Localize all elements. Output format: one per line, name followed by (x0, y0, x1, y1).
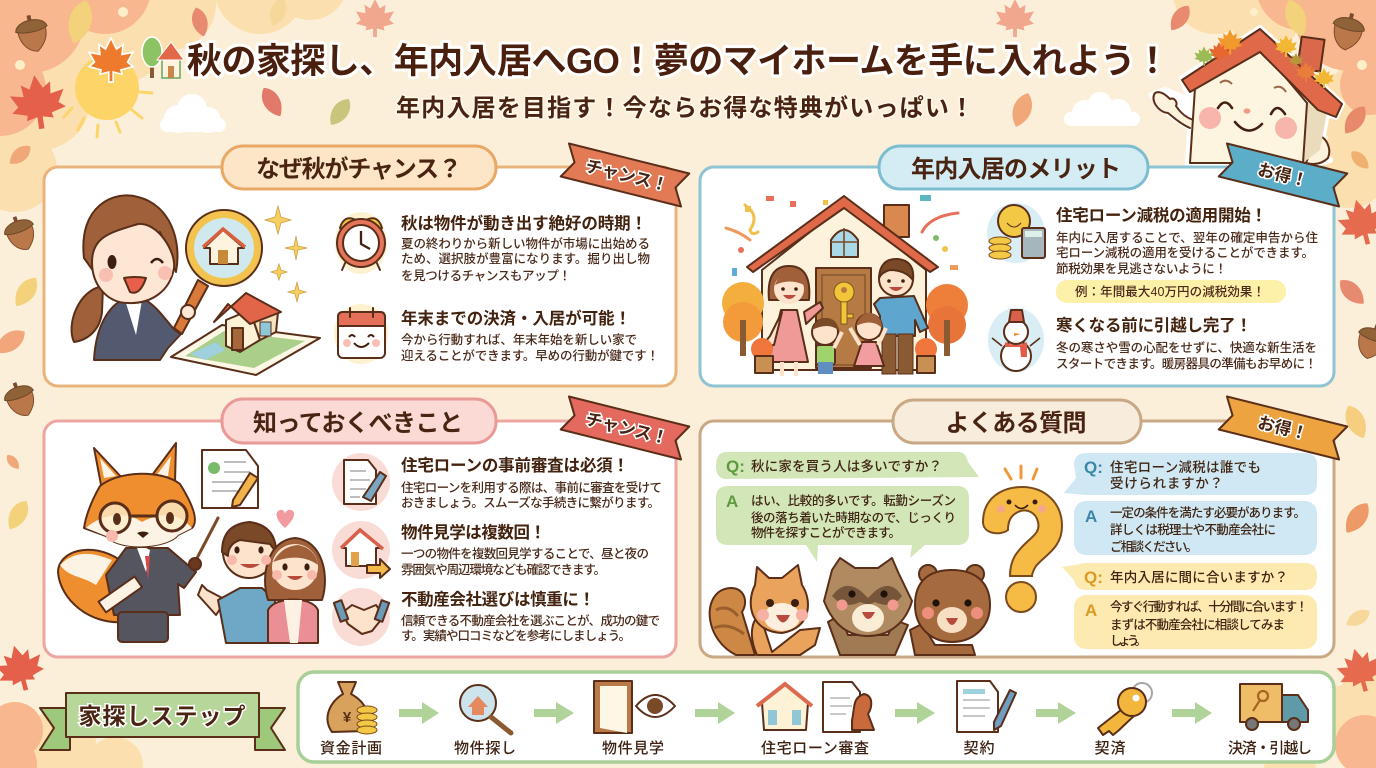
Q&A bubble: right answer 2: まずは不動産会社に相談してみま (1110, 617, 1285, 632)
text: 不動産会社選びは慎重に！ (401, 590, 660, 643)
text: 物件見学は複数回！: 雰囲気や周辺環境なども確認できます。 (401, 562, 606, 577)
Q&A bubble: right question 2: Q: (1084, 568, 1103, 587)
step: 決済・引越し: 決済・引越し (1228, 740, 1312, 757)
heading pill (222, 146, 496, 189)
ribbon: お得！ (1219, 144, 1347, 206)
Q&A bubble: right answer 2: A (1085, 601, 1097, 620)
illustration: fox advisor with couple (58, 443, 325, 643)
ribbon: 家探しステップ: 家探しステップ (78, 703, 246, 729)
text: 秋は物件が動き出す絶好の時期！: を見つけるチャンスもアップ！ (401, 269, 571, 283)
text: 寒くなる前に引越し完了！: 寒くなる前に引越し完了！ (1056, 316, 1252, 335)
step: 契約 (957, 681, 1016, 757)
illustration: squirrel, raccoon dog and bear (710, 558, 990, 655)
icon: house with arrow (332, 521, 390, 579)
cloud right (1064, 92, 1140, 126)
text: 物件見学は複数回！: 物件見学は複数回！ (401, 522, 546, 542)
Q&A bubble: right question 1: 受けられますか？ (1110, 475, 1223, 491)
ribbon: 家探しステップ (40, 693, 285, 750)
text: 住宅ローン減税の適用開始！: 住宅ローン減税の適用開始！ (1056, 206, 1267, 225)
text: 年末までの決済・入居が可能！: 年末までの決済・入居が可能！ (401, 308, 631, 328)
character: smiling question mark (983, 466, 1062, 612)
Q&A bubble: right answer 1: 詳しくは税理士や不動産会社に (1110, 522, 1276, 537)
ribbon: チャンス！: チャンス！ (584, 410, 670, 448)
heading pill (879, 146, 1148, 189)
illustration: agent with magnifier (72, 195, 320, 375)
ribbon: お得！ (1219, 397, 1347, 459)
Q&A bubble: left question: Q: (726, 457, 745, 476)
Q&A bubble: right question 1: 住宅ローン減税は誰でも (1110, 459, 1261, 475)
arrow (1036, 702, 1076, 724)
step: 住宅ローン審査: 住宅ローン審査 (761, 740, 869, 757)
subtitle: 年内入居を目指す！今ならお得な特典がいっぱい！ (396, 94, 974, 122)
text: 不動産会社選びは慎重に！: 不動産会社選びは慎重に！ (401, 590, 595, 609)
arrow (399, 702, 439, 724)
Q&A bubble: left question: 秋に家を買う人は多いですか？ (751, 458, 942, 474)
text: 秋は物件が動き出す絶好の時期！: 秋は物件が動き出す絶好の時期！ (401, 213, 647, 233)
text: 物件見学は複数回！ (401, 522, 649, 577)
step: 物件探し: 物件探し (454, 740, 516, 757)
ribbon: チャンス！ (561, 397, 689, 459)
Q&A bubble: left answer: 後の落ち着いた時期なので、じっくり (751, 510, 956, 525)
house mascot (1152, 28, 1342, 168)
Q&A bubble: right answer 1: ご相談ください。 (1110, 539, 1198, 554)
arrow (534, 702, 574, 724)
arrow (895, 702, 935, 724)
ribbon: チャンス！: チャンス！ (584, 157, 670, 195)
Q&A bubble: left answer: A (726, 492, 738, 511)
Q&A bubble: right answer 2 (1074, 595, 1317, 649)
text: 物件見学は複数回！: 一つの物件を複数回見学することで、昼と夜の (401, 546, 649, 561)
arrow (695, 702, 735, 724)
text: 寒くなる前に引越し完了！: 冬の寒さや雪の心配をせずに、快適な新生活を (1056, 340, 1317, 355)
arrow (1172, 702, 1212, 724)
icon: handshake (332, 588, 390, 646)
step: 物件見学: 物件見学 (602, 740, 664, 757)
icon: coins and calculator (987, 203, 1045, 263)
text: 秋は物件が動き出す絶好の時期！: 夏の終わりから新しい物件が市場に出始める (401, 236, 650, 251)
step: 資金計画: ¥ (343, 709, 352, 726)
panel: 知っておくべきこと (44, 397, 689, 657)
Q&A bubble: right answer 1 (1074, 501, 1317, 555)
heading pill (893, 400, 1141, 443)
Q&A bubble: right question 2: 年内入居に間に合いますか？ (1110, 569, 1288, 585)
text: 秋は物件が動き出す絶好の時期！ (401, 213, 650, 283)
icon: snowman (988, 308, 1044, 372)
step: 資金計画: 資金計画 (320, 740, 382, 757)
step: 契済: 契済 (1094, 740, 1126, 757)
heading pill: なぜ秋がチャンス？ (256, 155, 462, 183)
Q&A bubble: left answer: はい、比較的多いです。転勤シーズン (751, 493, 956, 508)
Q&A bubble: left answer: 物件を探すことができます。 (751, 525, 901, 540)
Q&A bubble: left answer (716, 486, 969, 562)
step: 物件探し (454, 685, 516, 757)
Q&A bubble: left question (716, 452, 979, 479)
Q&A bubble: right answer 1: 一定の条件を満たす必要があります。 (1110, 505, 1306, 520)
Q&A bubble: right answer 2: 今すぐ行動すれば、十分間に合います！ (1110, 599, 1308, 614)
heading pill (222, 399, 496, 443)
icon: alarm clock (335, 212, 387, 274)
Q&A bubble: right answer 1: A (1085, 507, 1097, 526)
cloud left (160, 94, 226, 133)
step: 物件見学 (594, 681, 675, 757)
illustration: family at new house (722, 195, 968, 376)
text: 年末までの決済・入居が可能！: 今から行動すれば、年末年始を新しい家で (401, 332, 637, 347)
Q&A bubble: right question 2 (1062, 563, 1317, 590)
text: 年末までの決済・入居が可能！ (401, 308, 659, 363)
panel: 年内入居のメリット (700, 144, 1347, 386)
panel: なぜ秋がチャンス？ (44, 144, 689, 386)
text: 年末までの決済・入居が可能！: 迎えることができます。早めの行動が鍵です！ (401, 348, 659, 363)
text: 寒くなる前に引越し完了！: スタートできます。暖房器具の準備もお早めに！ (1056, 356, 1317, 371)
callout: example (1056, 280, 1286, 303)
text: 住宅ローンの事前審査は必須！: 住宅ローンの事前審査は必須！ (401, 456, 629, 475)
text: 住宅ローンの事前審査は必須！: 住宅ローンを利用する際は、事前に審査を受けて (401, 480, 662, 495)
panel: home-search steps (298, 672, 1334, 762)
text: 不動産会社選びは慎重に！: 信頼できる不動産会社を選ぶことが、成功の鍵で (401, 613, 660, 628)
panel: よくある質問 (700, 397, 1347, 657)
heading pill: よくある質問 (946, 410, 1086, 437)
text: 住宅ローンの事前審査は必須！ (401, 456, 662, 510)
ribbon: お得！: お得！ (1256, 413, 1310, 444)
text: 住宅ローン減税の適用開始！: 節税効果を見逃さないように！ (1056, 261, 1227, 276)
heading pill: 知っておくべきこと (253, 410, 463, 437)
step: 決済・引越し (1228, 684, 1312, 757)
text: 寒くなる前に引越し完了！ (1056, 316, 1317, 371)
step: 住宅ローン審査 (757, 682, 874, 757)
sun (64, 56, 152, 137)
step: 契約: 契約 (964, 740, 994, 757)
ribbon: お得！: お得！ (1256, 160, 1310, 191)
text: 住宅ローン減税の適用開始！: 年内に入居することで、翌年の確定申告から住 (1056, 230, 1318, 245)
Q&A bubble: right question 1: Q: (1084, 458, 1103, 477)
Q&A bubble: right answer 2: しょう。 (1110, 634, 1147, 648)
icon: document and pen (332, 453, 390, 511)
callout: example: 例：年間最大40万円の減税効果！ (1075, 284, 1265, 299)
text: 住宅ローンの事前審査は必須！: おきましょう。スムーズな手続きに繋がります。 (401, 495, 660, 510)
ribbon: チャンス！ (561, 144, 689, 206)
heading pill: 年内入居のメリット (911, 156, 1121, 183)
text: 秋は物件が動き出す絶好の時期！: ため、選択肢が豊富になります。掘り出し物 (401, 251, 650, 266)
step: 契済 (1094, 683, 1152, 757)
text: 住宅ローン減税の適用開始！: 宅ローン減税の適用を受けることができます。 (1056, 245, 1314, 260)
step: 資金計画 (320, 682, 382, 757)
icon: smiling calendar (334, 304, 388, 364)
title: 秋の家探し、年内入居へGO！夢のマイホームを手に入れよう！ (187, 42, 1170, 81)
text: 不動産会社選びは慎重に！: す。実績や口コミなどを参考にしましょう。 (401, 628, 631, 643)
text: 住宅ローン減税の適用開始！ (1056, 206, 1318, 276)
Q&A bubble: right question 1 (1064, 453, 1317, 495)
